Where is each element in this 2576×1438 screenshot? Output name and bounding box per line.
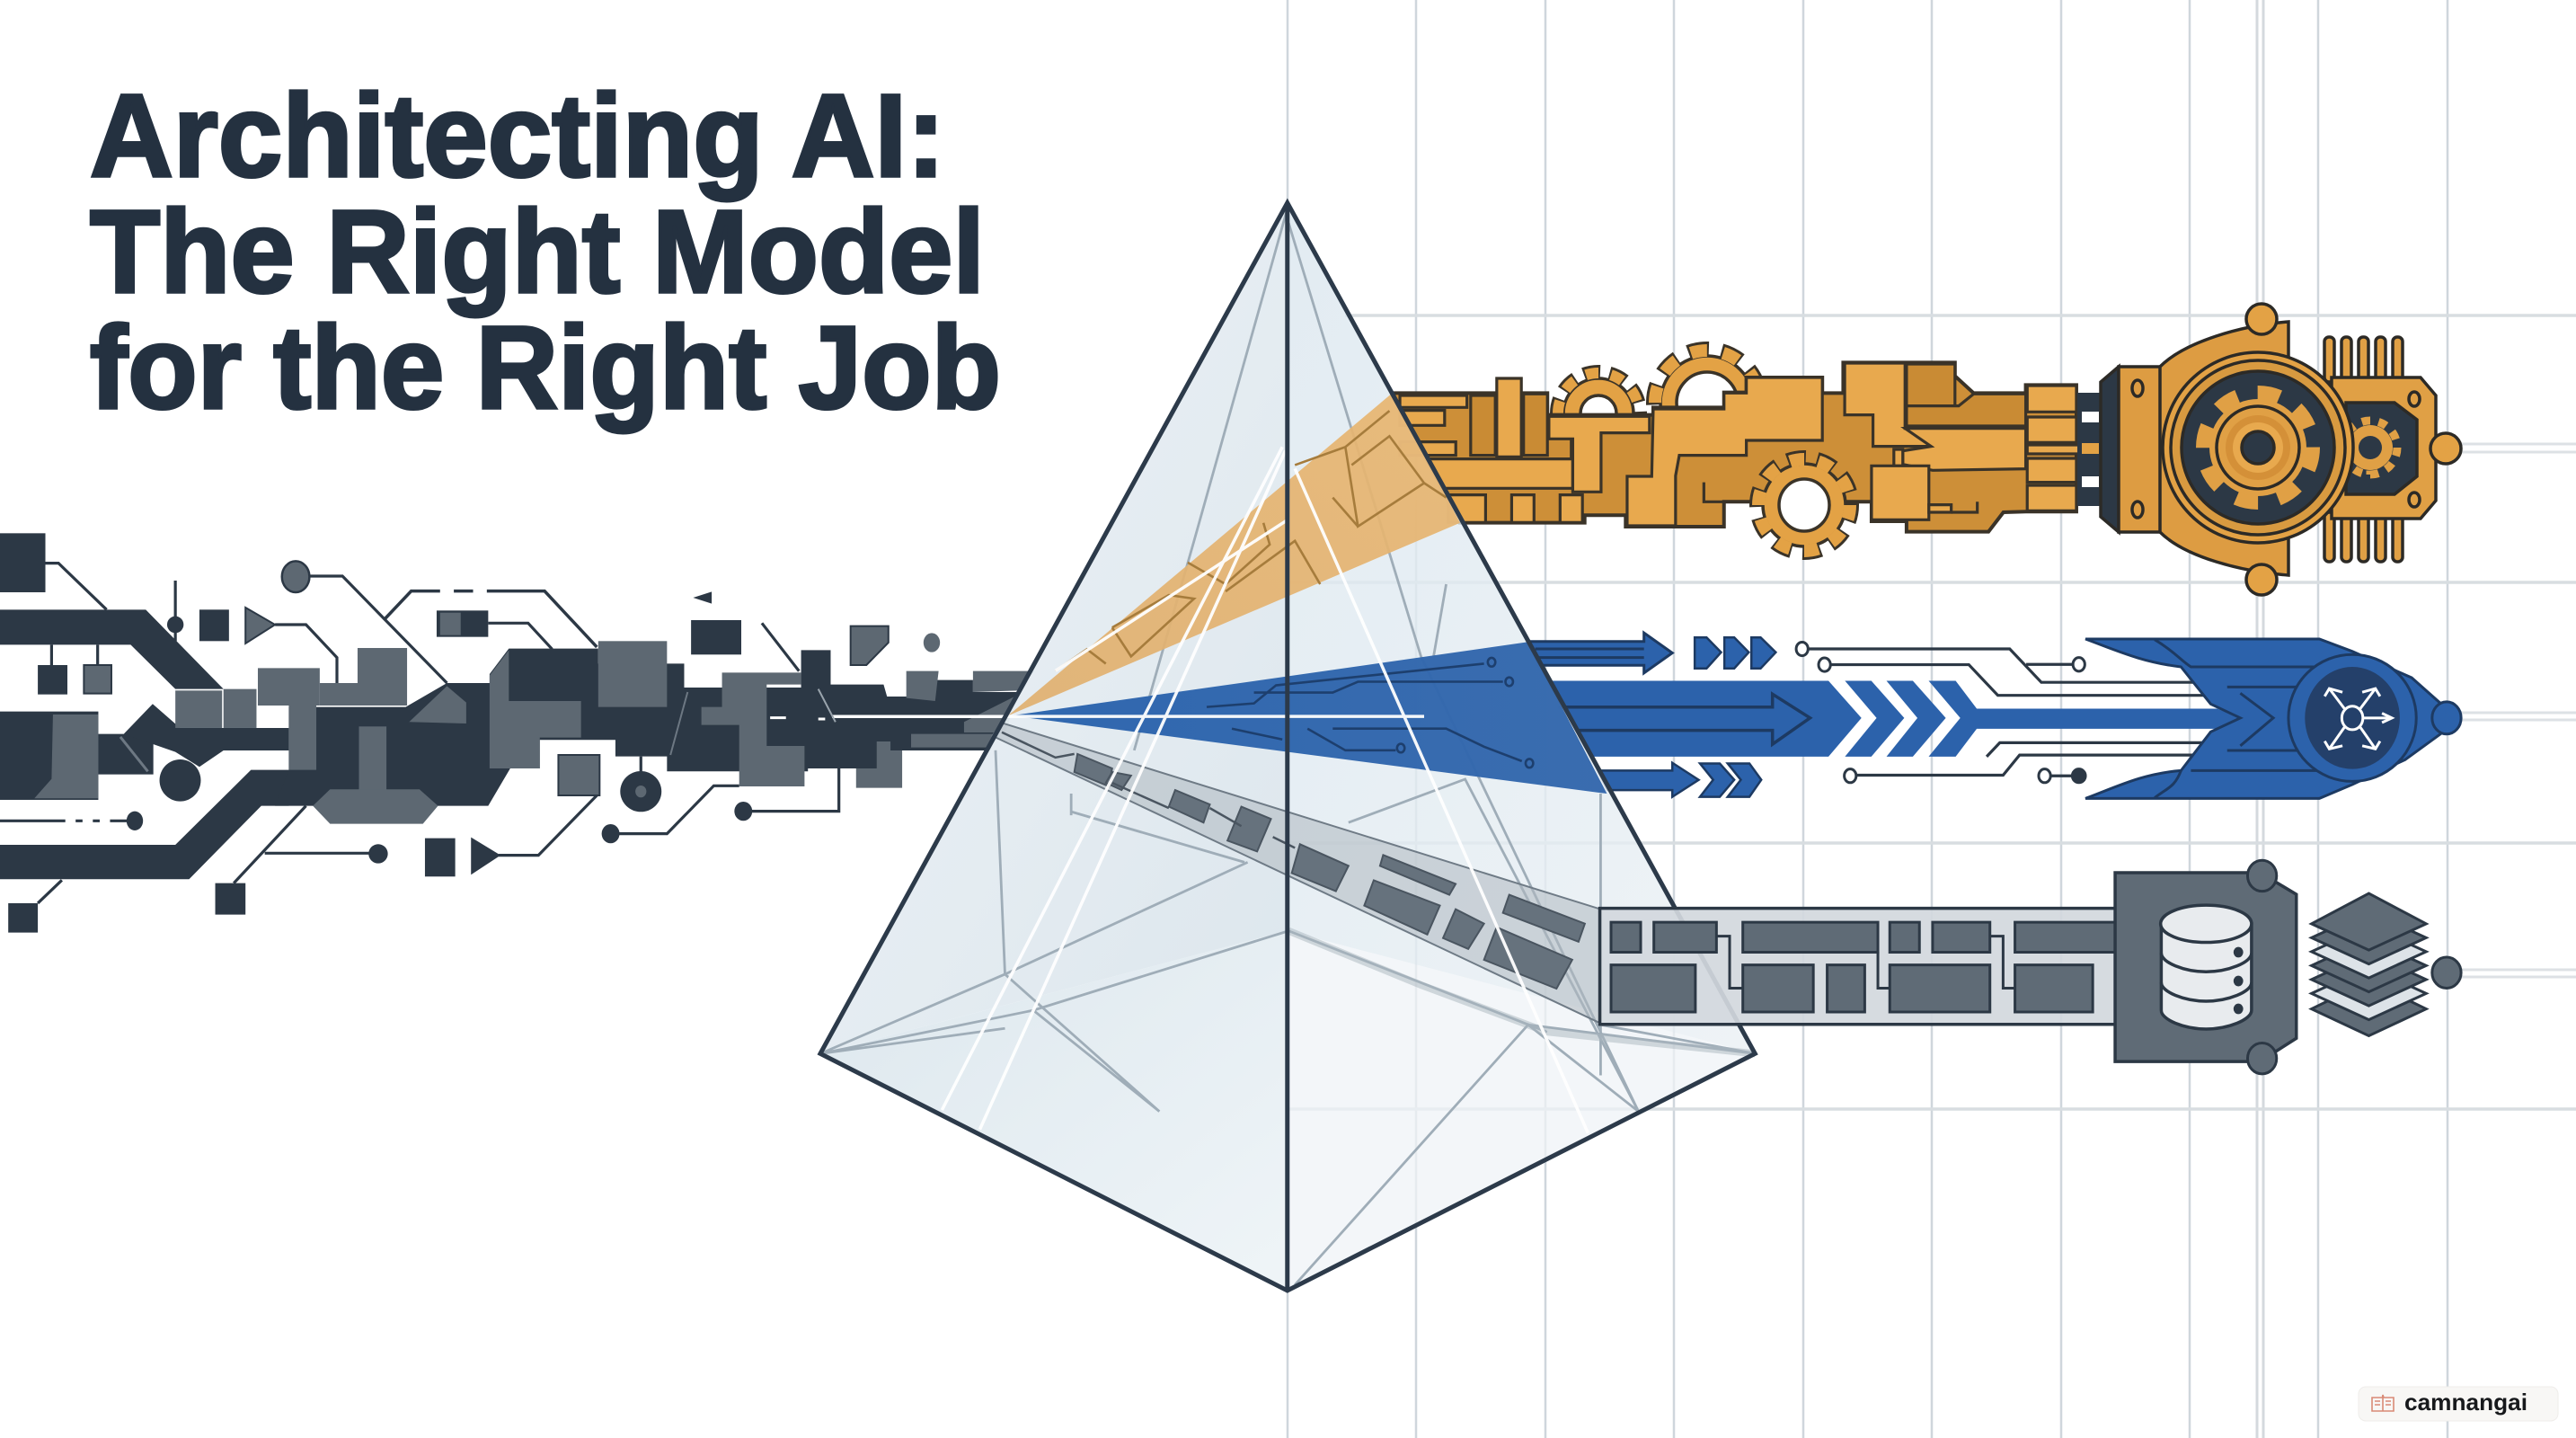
left input stream: tangled dark circuitry xyxy=(0,533,1035,933)
blue output: speed arrows xyxy=(1528,633,2461,798)
prism xyxy=(820,203,1755,1291)
small gear in plate xyxy=(2343,421,2397,475)
rocket head xyxy=(2085,639,2461,798)
prism faces xyxy=(820,203,1755,1291)
lower ring gear xyxy=(1757,457,1852,553)
light ray entering prism xyxy=(120,689,1014,771)
right plate xyxy=(2332,377,2436,519)
database housing xyxy=(2115,873,2297,1061)
amber machine body xyxy=(1393,362,2098,532)
main chevrons xyxy=(1845,680,2240,757)
title: for the Right Job xyxy=(90,301,1001,433)
data blocks xyxy=(1611,922,2117,1012)
prism outline xyxy=(820,203,1755,1291)
icon: network hub xyxy=(2324,688,2392,749)
connector between bar and engine xyxy=(2077,393,2119,506)
blueprint grid xyxy=(1288,0,2576,1438)
top chevrons xyxy=(1695,637,1775,669)
gray blocks xyxy=(34,561,1035,824)
icon: database cylinder xyxy=(2161,905,2252,1029)
top arrow xyxy=(1528,633,1672,673)
gray beam xyxy=(992,723,1755,1053)
brand name: camnangai xyxy=(2404,1389,2527,1416)
knobs xyxy=(2246,304,2277,334)
cooling fins xyxy=(2324,337,2403,562)
trace terminals xyxy=(1796,642,2085,783)
medium arch gear xyxy=(1653,349,1761,457)
left plate and housing xyxy=(2101,367,2119,532)
main ring xyxy=(2163,352,2353,543)
thin circuit traces xyxy=(0,564,839,903)
main arrow bar xyxy=(1552,680,1862,757)
internal facet lines xyxy=(820,209,1755,1285)
white refraction highlights xyxy=(942,447,1588,1133)
title: Architecting AI: xyxy=(90,69,945,201)
icon: open book xyxy=(2372,1395,2394,1411)
icon: layered stack xyxy=(2312,893,2426,1036)
title xyxy=(90,69,1001,433)
watermark badge xyxy=(2359,1387,2558,1421)
circuit traces xyxy=(1809,649,2210,776)
bottom chevrons xyxy=(1700,763,1761,797)
dark blocks xyxy=(0,533,1018,933)
title: The Right Model xyxy=(90,185,985,317)
blue beam xyxy=(1012,642,1607,794)
gray output: data pipeline xyxy=(1600,860,2461,1074)
bottom arrow xyxy=(1598,763,1699,797)
amber output: gear machine xyxy=(1393,304,2461,595)
amber beam xyxy=(1008,393,1460,715)
data bar xyxy=(1600,909,2117,1025)
small arch gear xyxy=(1556,371,1641,456)
gear engine head xyxy=(2101,304,2461,595)
main gear xyxy=(2204,394,2312,502)
